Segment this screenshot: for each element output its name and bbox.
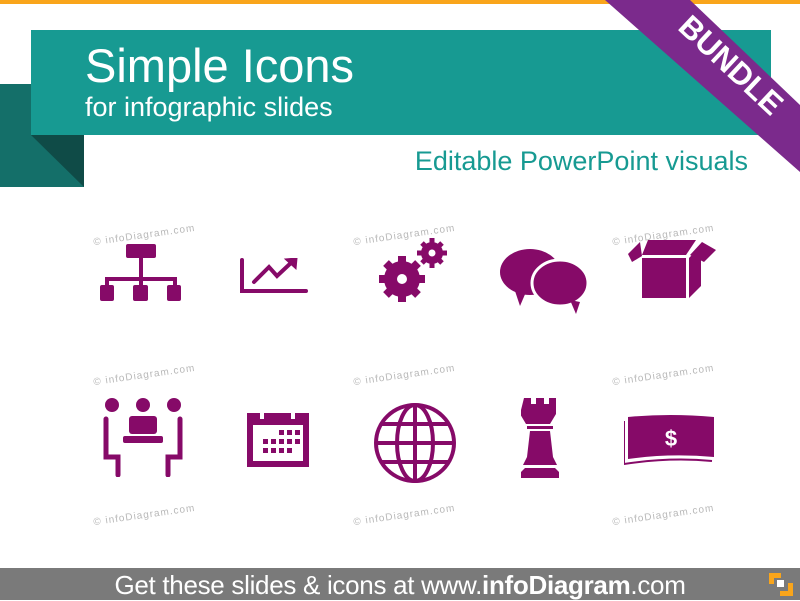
text: © infoDiagram.com xyxy=(612,363,715,388)
icon: meeting xyxy=(104,398,182,477)
icon: corner logo xyxy=(769,573,793,596)
text: © infoDiagram.com xyxy=(612,503,715,528)
dark teal left block xyxy=(0,84,84,187)
icon: growth chart xyxy=(240,258,308,293)
watermarks xyxy=(93,223,715,528)
tagline: Editable PowerPoint visuals xyxy=(415,146,748,176)
title: Simple Icons xyxy=(85,39,354,92)
icon: calendar xyxy=(247,413,309,467)
top orange line xyxy=(0,0,800,4)
text: © infoDiagram.com xyxy=(353,503,456,528)
ribbon: bundle xyxy=(605,0,800,172)
title banner xyxy=(31,30,771,135)
icon: gears xyxy=(379,238,447,302)
text: © infoDiagram.com xyxy=(353,363,456,388)
text: © infoDiagram.com xyxy=(612,223,715,248)
subtitle: for infographic slides xyxy=(85,92,333,122)
icon: chess rook xyxy=(521,398,559,478)
icon: dollar bill xyxy=(624,415,714,465)
footer bar xyxy=(0,568,800,600)
text: © infoDiagram.com xyxy=(93,503,196,528)
text: © infoDiagram.com xyxy=(93,223,196,248)
icon: open box xyxy=(628,240,716,298)
ribbon: bundle: BUNDLE xyxy=(672,8,790,122)
icon: speech bubbles xyxy=(500,249,586,314)
footer text: Get these slides & icons at www.infoDiagram.com xyxy=(114,570,686,600)
icon: org chart xyxy=(100,244,181,301)
dark fold triangle xyxy=(31,135,84,187)
text: © infoDiagram.com xyxy=(93,363,196,388)
icon: dollar bill: $ xyxy=(665,426,677,451)
icon: globe xyxy=(374,403,456,483)
text: © infoDiagram.com xyxy=(353,223,456,248)
